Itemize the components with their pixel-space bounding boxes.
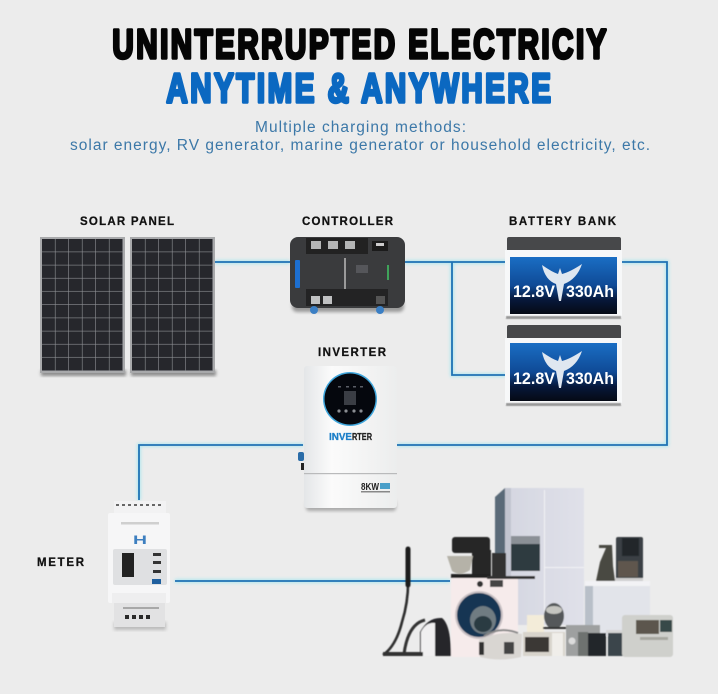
kettle: [596, 545, 615, 581]
white appliance: [527, 615, 544, 632]
microwave: [523, 632, 565, 656]
title: UNINTERRUPTED ELECTRICIY: [112, 21, 607, 67]
battery 1: 330Ah: [566, 282, 614, 301]
connection wires: [139, 262, 667, 581]
meter: H: [133, 533, 147, 547]
solar panels: [40, 237, 216, 376]
small appliances and mugs: [566, 625, 632, 656]
espresso machine: [622, 615, 673, 657]
appliance beside mixer: [492, 553, 506, 579]
inverter: INVE: [329, 431, 352, 443]
appliances group: [383, 488, 673, 660]
slow cooker: [479, 630, 522, 660]
vacuum cleaner: [383, 549, 451, 656]
battery 2: 330Ah: [566, 369, 614, 388]
description text: [70, 119, 650, 154]
subtitle heading: ANYTIME & ANYWHERE: [166, 65, 551, 111]
inverter: 8KW: [361, 482, 379, 493]
battery 1: [505, 237, 622, 319]
description text: solar energy, RV generator, marine generator or household electricity, etc.: [70, 137, 650, 154]
washing machine: [451, 576, 535, 657]
solar panel right: [130, 237, 216, 376]
small kettle: [543, 603, 567, 629]
label: solar panel: SOLAR PANEL: [80, 216, 174, 228]
fridge: [495, 488, 584, 625]
freezer: [585, 581, 650, 636]
controller: [290, 237, 405, 314]
label: inverter: INVERTER: [318, 347, 387, 359]
description text: Multiple charging methods:: [255, 119, 466, 136]
solar panel left: [40, 237, 126, 376]
coffee maker: [614, 537, 643, 581]
battery 2: 12.8V: [513, 369, 556, 388]
battery 2: [505, 325, 622, 406]
inverter: RTER: [352, 431, 372, 443]
stand mixer: [447, 537, 491, 578]
label: battery bank: BATTERY BANK: [509, 216, 617, 228]
label: meter: METER: [37, 557, 85, 569]
meter: [108, 501, 170, 630]
battery 1: 12.8V: [513, 282, 556, 301]
label: controller: CONTROLLER: [302, 216, 394, 228]
inverter: [298, 366, 397, 511]
